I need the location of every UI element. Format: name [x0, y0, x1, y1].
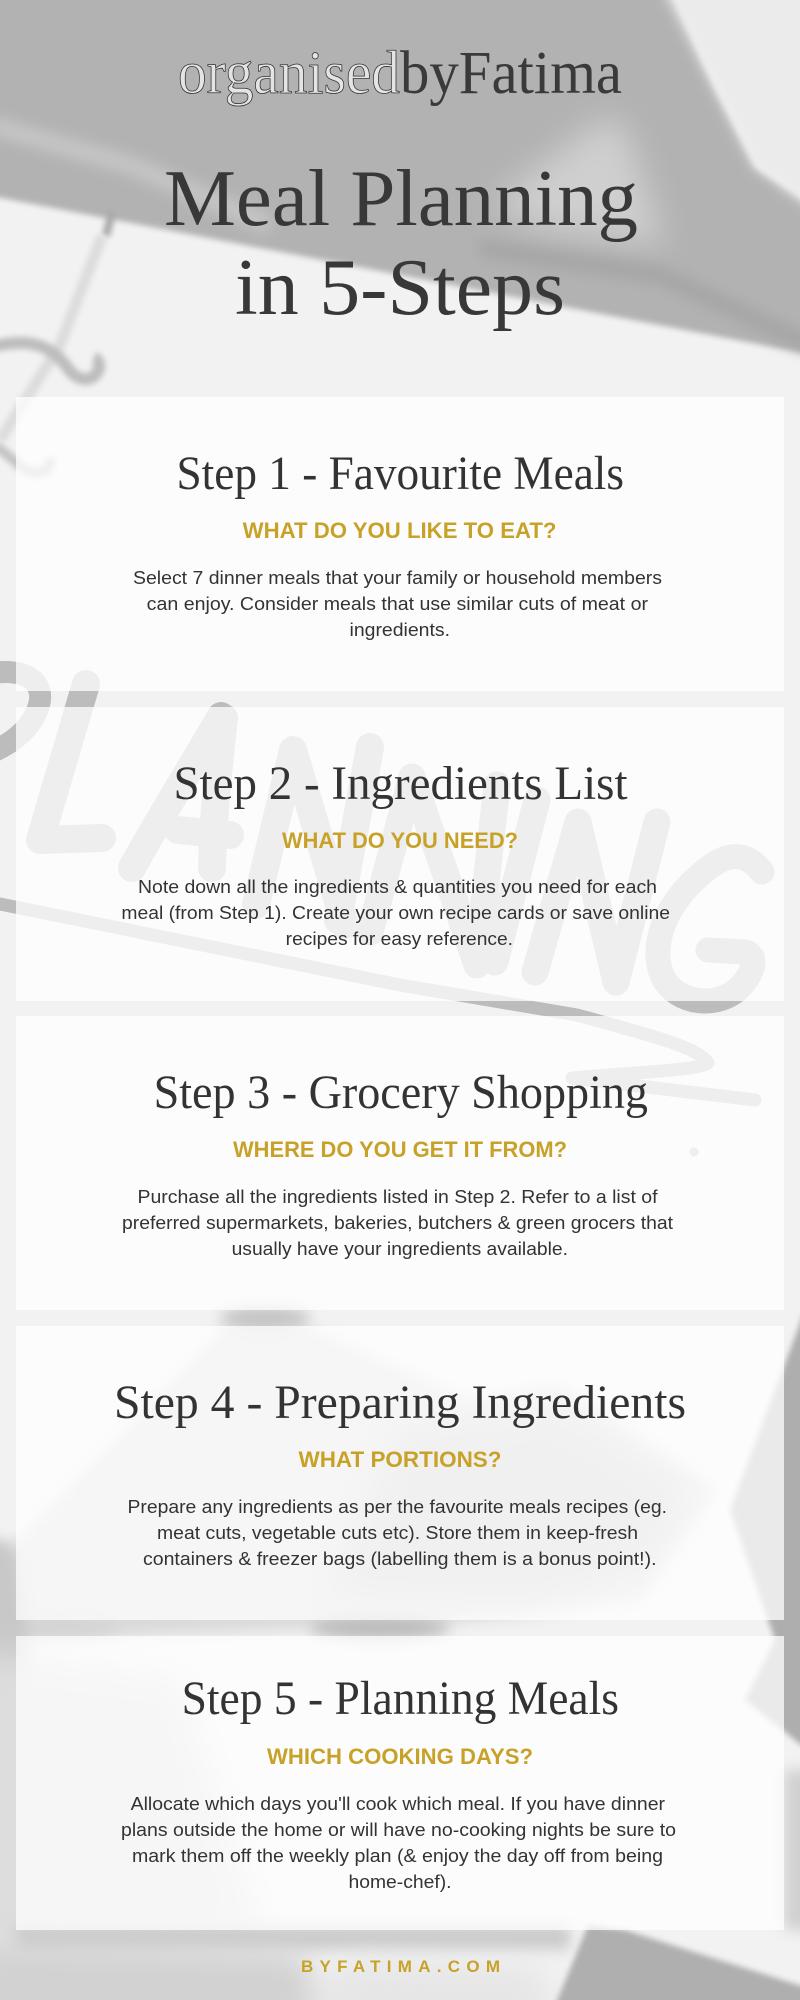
panel: step 3: WHERE DO YOU GET IT FROM? [233, 1137, 567, 1162]
footer website: BYFATIMA.COM [301, 1957, 500, 1976]
logo wordmark: organised [178, 40, 400, 107]
panel: step 4: WHAT PORTIONS? [298, 1447, 502, 1472]
panel: step 4: Prepare any ingredients as per the favourite meals recipes (eg. [128, 1497, 667, 1517]
panel: step 2 [16, 707, 784, 1001]
panel: step 1: can enjoy. Consider meals that use similar cuts of meat or [147, 594, 648, 614]
panel: step 5: plans outside the home or will have no-cooking nights be sure to [121, 1820, 676, 1840]
panel: step 1: WHAT DO YOU LIKE TO EAT? [243, 518, 556, 543]
panel: step 1 [16, 397, 784, 691]
handwritten word: PLANNING with underline swoosh [0, 672, 762, 1156]
panel: step 5 [16, 1636, 784, 1930]
panel: step 4: containers & freezer bags (labelling them is a bonus point!). [143, 1549, 656, 1569]
panel: step 5: WHICH COOKING DAYS? [267, 1744, 533, 1769]
panel: step 3: usually have your ingredients available. [232, 1239, 568, 1259]
panel: step 2: Step 2 - Ingredients List [174, 757, 628, 810]
panel: step 5: home-chef). [348, 1872, 452, 1892]
background: blurred photo, bottom [0, 1270, 800, 2000]
panel: step 3: Step 3 - Grocery Shopping [154, 1066, 648, 1119]
panel: step 4: meat cuts, vegetable cuts etc). Store them in keep-fresh [157, 1523, 638, 1543]
panel: step 3: Purchase all the ingredients listed in Step 2. Refer to a list of [138, 1187, 659, 1207]
panel: step 1: Step 1 - Favourite Meals [176, 447, 624, 500]
panel: step 1: Select 7 dinner meals that your family or household members [133, 568, 662, 588]
panel: step 5: Allocate which days you'll cook which meal. If you have dinner [131, 1794, 665, 1814]
logo wordmark: byFatima [400, 40, 622, 107]
panel: step 4 [16, 1326, 784, 1620]
panel: step 2: meal (from Step 1). Create your own recipe cards or save online [121, 903, 670, 923]
panel: step 3 [16, 1016, 784, 1310]
panel: step 2: WHAT DO YOU NEED? [282, 828, 518, 853]
panel: step 4: Step 4 - Preparing Ingredients [114, 1376, 686, 1429]
panel: step 5: mark them off the weekly plan (& enjoy the day off from being [132, 1846, 663, 1866]
title: in 5-Steps [235, 244, 565, 332]
title: Meal Planning [164, 155, 638, 243]
panel: step 3: preferred supermarkets, bakeries, butchers & green grocers that [122, 1213, 673, 1233]
panel: step 5: Step 5 - Planning Meals [182, 1672, 619, 1725]
panel: step 1: ingredients. [350, 620, 450, 640]
panel: step 2: Note down all the ingredients & quantities you need for each [138, 877, 657, 897]
title [164, 155, 638, 332]
panel: step 2: recipes for easy reference. [286, 929, 513, 949]
logo wordmark [178, 40, 622, 107]
